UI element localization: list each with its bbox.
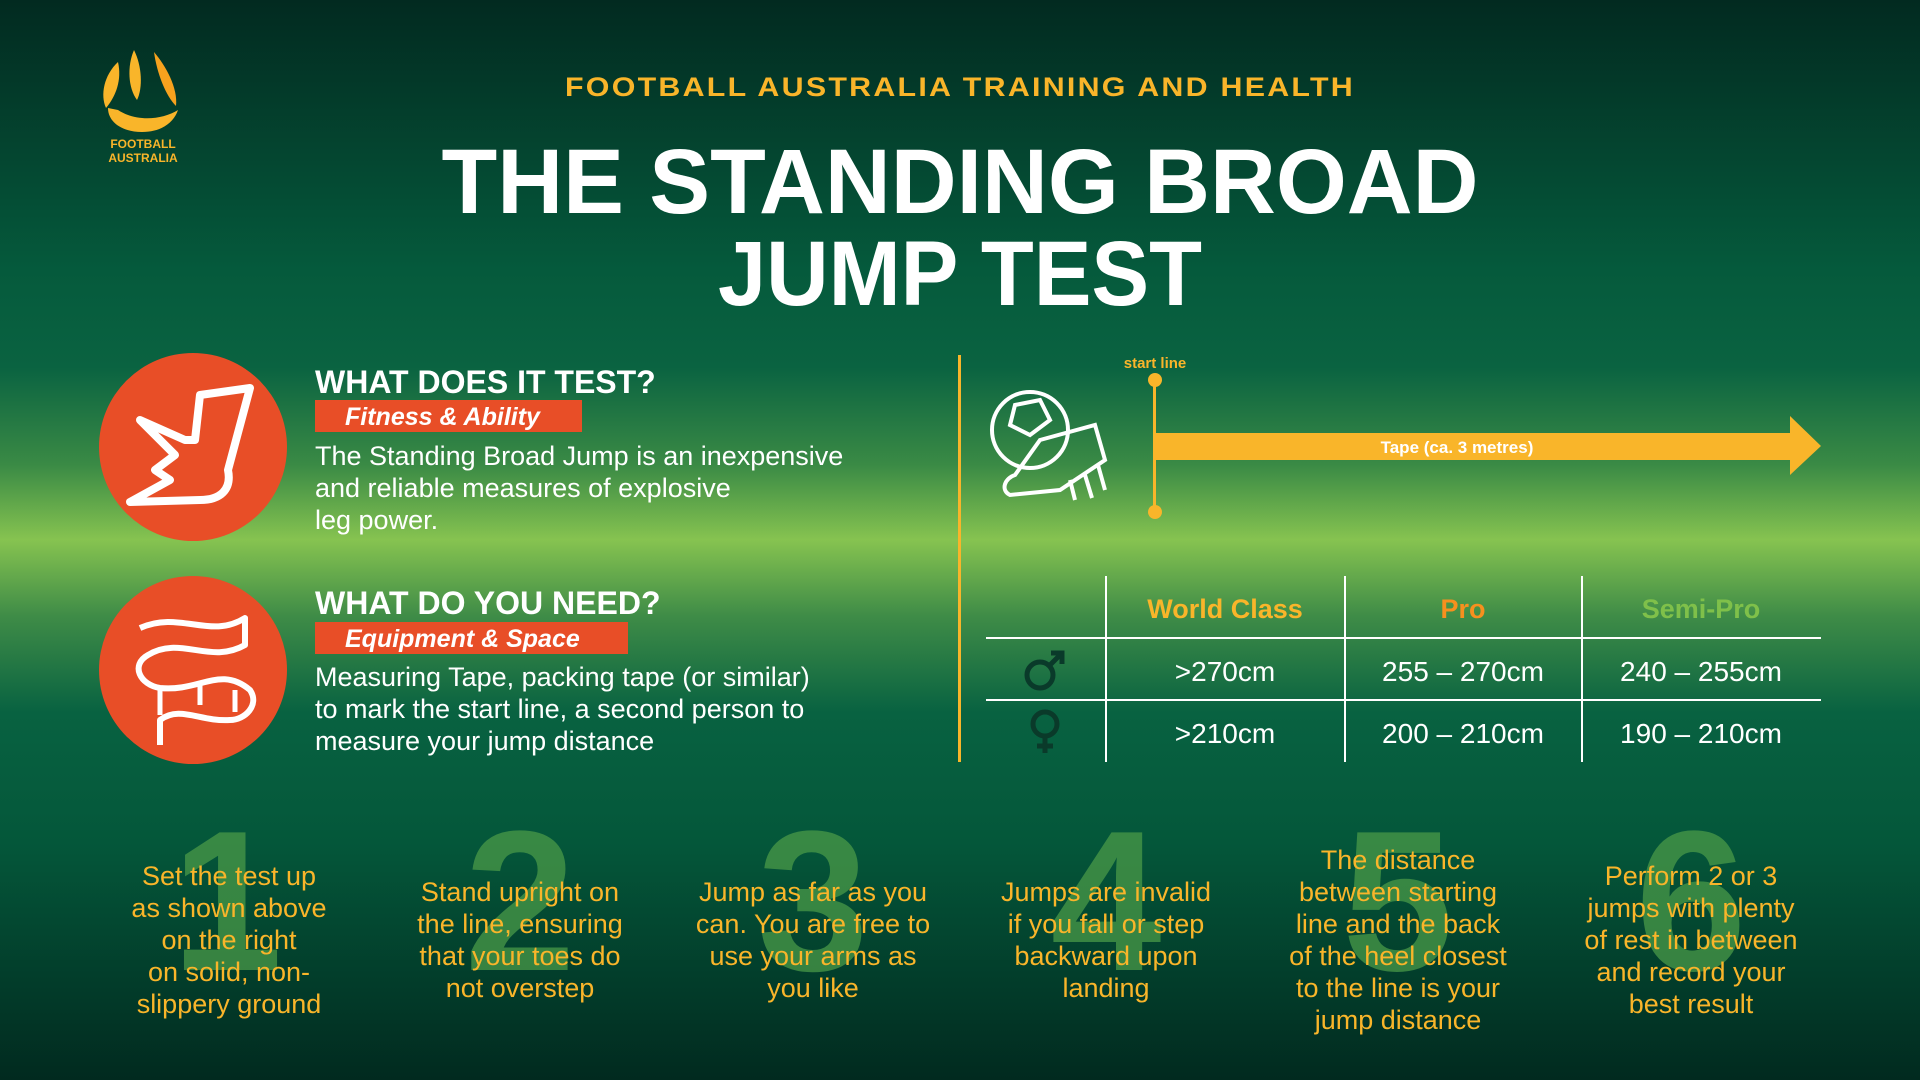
steps: slippery ground (137, 989, 321, 1019)
diagram: start line and tape arrow (1124, 355, 1821, 519)
panel: what does it test (315, 364, 843, 535)
table: benchmarks (986, 576, 1821, 762)
steps: use your arms as (709, 941, 917, 971)
table: benchmarks: >210cm (1175, 718, 1275, 749)
steps: that your toes do (419, 941, 621, 971)
table: benchmarks: Pro (1440, 594, 1486, 624)
table: benchmarks: Semi-Pro (1642, 594, 1760, 624)
subtitle: FOOTBALL AUSTRALIA TRAINING AND HEALTH (565, 72, 1355, 102)
panel: what does it test: leg power. (315, 505, 438, 535)
icon: football and boot (992, 392, 1105, 500)
steps: 6 (1635, 790, 1747, 1013)
steps: if you fall or step (1008, 909, 1204, 939)
steps: the line, ensuring (417, 909, 623, 939)
panel: what do you need (315, 585, 810, 756)
icon: female symbol (1033, 712, 1057, 753)
steps: you like (767, 973, 859, 1003)
title: JUMP TEST (718, 223, 1202, 325)
panel: what do you need: Measuring Tape, packing tape (or similar) (315, 662, 810, 692)
steps: 3 (757, 790, 869, 1013)
table: benchmarks: World Class (1147, 594, 1303, 624)
logo: FOOTBALL (110, 137, 176, 151)
steps: jump distance (1314, 1005, 1481, 1035)
panel: what do you need: Equipment & Space (345, 625, 580, 653)
diagram: start line and tape arrow: start line (1124, 355, 1186, 372)
table: benchmarks: >270cm (1175, 656, 1275, 687)
table: benchmarks: 200 – 210cm (1382, 718, 1544, 749)
panel: what do you need: to mark the start line, a second person to (315, 694, 804, 724)
steps: 4 (1050, 790, 1162, 1013)
steps: and record your (1596, 957, 1786, 987)
icon: measuring tape (99, 576, 287, 764)
title (442, 131, 1478, 325)
steps: 1 (171, 790, 283, 1013)
panel: what does it test: The Standing Broad Jump is an inexpensive (315, 441, 843, 471)
steps: 2 (464, 790, 576, 1013)
steps: on solid, non- (148, 957, 310, 987)
steps: best result (1629, 989, 1754, 1019)
panel: what do you need: WHAT DO YOU NEED? (315, 585, 660, 621)
panel: what does it test: Fitness & Ability (345, 403, 541, 431)
table: benchmarks: 240 – 255cm (1620, 656, 1782, 687)
panel: what do you need: measure your jump distance (315, 726, 654, 756)
steps: line and the back (1296, 909, 1501, 939)
logo: AUSTRALIA (108, 151, 178, 165)
steps: 5 (1342, 790, 1454, 1013)
icon: leg jump (99, 353, 287, 541)
steps: Jumps are invalid (1001, 877, 1211, 907)
panel: what does it test: and reliable measures of explosive (315, 473, 731, 503)
steps: on the right (161, 925, 297, 955)
steps: not overstep (446, 973, 594, 1003)
steps: of the heel closest (1289, 941, 1507, 971)
title: THE STANDING BROAD (442, 131, 1478, 233)
steps: landing (1062, 973, 1150, 1003)
diagram: start line and tape arrow: Tape (ca. 3 metres) (1381, 438, 1533, 457)
steps: jumps with plenty (1586, 893, 1795, 923)
table: benchmarks: 190 – 210cm (1620, 718, 1782, 749)
steps: Jump as far as you (699, 877, 927, 907)
steps: of rest in between (1584, 925, 1798, 955)
steps: Stand upright on (421, 877, 619, 907)
steps: Set the test up (142, 861, 316, 891)
steps: backward upon (1014, 941, 1198, 971)
steps: The distance (1321, 845, 1475, 875)
steps: as shown above (131, 893, 327, 923)
steps: between starting (1299, 877, 1497, 907)
logo (103, 50, 178, 165)
panel: what does it test: WHAT DOES IT TEST? (315, 364, 656, 400)
steps: to the line is your (1296, 973, 1500, 1003)
steps (131, 790, 1798, 1035)
steps: can. You are free to (696, 909, 930, 939)
table: benchmarks: 255 – 270cm (1382, 656, 1544, 687)
steps: Perform 2 or 3 (1605, 861, 1777, 891)
icon: male symbol (1027, 653, 1062, 688)
